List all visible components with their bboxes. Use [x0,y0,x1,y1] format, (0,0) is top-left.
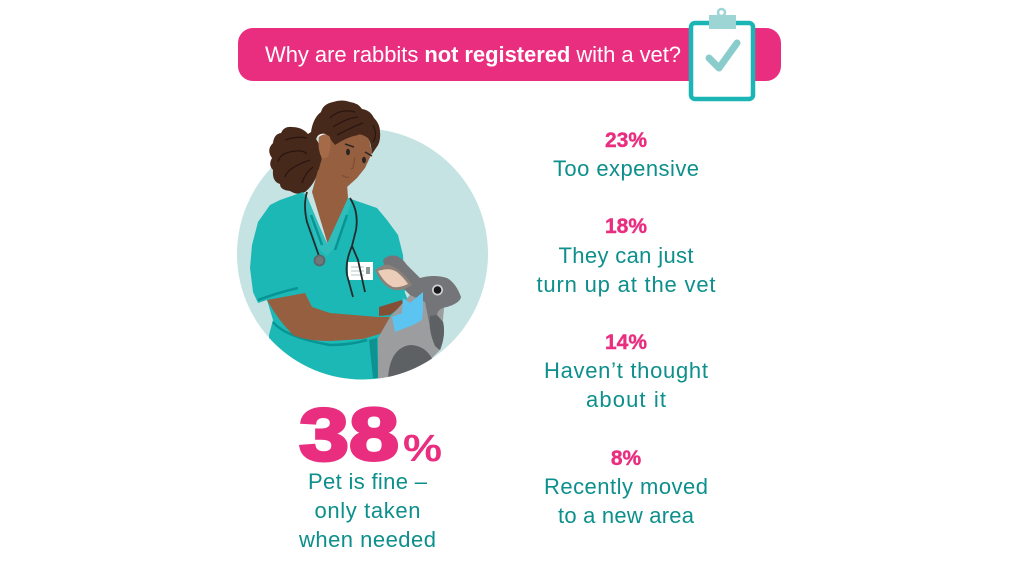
vet ear [318,134,331,159]
stat: 14% haven't thought about it: 14% [605,331,647,354]
heading banner [238,28,781,81]
stat: 23% too expensive [553,129,699,181]
stat: 8% recently moved [544,447,708,528]
rabbit [375,256,461,385]
stat: 38% [299,393,442,476]
vet face [318,130,372,189]
vet neck [312,170,348,245]
stat: 18% can just turn up: turn up at the vet [536,272,716,297]
scrubs [250,192,408,385]
vet hair [311,100,380,154]
stat: 38%: 38 [299,393,399,476]
blue glove [392,292,423,332]
illustration: vet with rabbit [237,100,488,385]
hair curls [278,111,376,183]
vet arm [267,293,393,341]
label: pet is fine: only taken [314,498,420,523]
icon: clipboard with check mark [691,9,753,99]
stat: 18% can just turn up [536,215,716,297]
stat: 14% haven't thought about it [544,331,708,412]
label: pet is fine [298,469,436,552]
stat: 8% recently moved: to a new area [558,503,695,528]
stat: 23% too expensive: 23% [605,129,647,152]
label: pet is fine: when needed [298,527,436,552]
stat: 14% haven't thought about it: about it [586,387,666,412]
stat: 23% too expensive: Too expensive [553,156,699,181]
heading banner: Why are rabbits not registered with a vet? [265,42,681,67]
stat: 38%: % [403,428,442,470]
stat: 14% haven't thought about it: Haven’t thought [544,358,708,383]
label: pet is fine: Pet is fine – [308,469,428,494]
stethoscope [305,192,365,297]
face details [346,149,366,163]
stat: 8% recently moved: 8% [611,447,641,470]
stat: 8% recently moved: Recently moved [544,474,708,499]
background circle [237,128,488,380]
name badge [348,262,373,280]
vet ponytail [269,127,322,194]
stat: 18% can just turn up: They can just [558,243,694,268]
stat: 18% can just turn up: 18% [605,215,647,238]
